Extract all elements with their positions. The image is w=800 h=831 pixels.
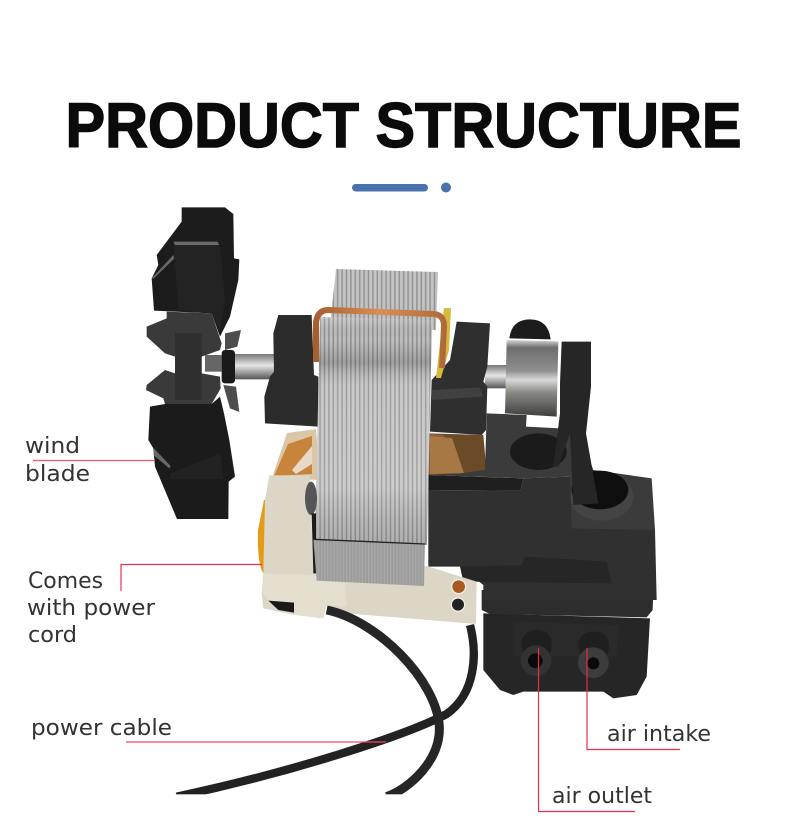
nozzle: air intake bbox=[578, 632, 609, 678]
pivot hole bbox=[510, 433, 567, 470]
tape-wrapped coil bbox=[258, 429, 464, 573]
label: wind blade: blade bbox=[25, 462, 90, 487]
copper shading ring bbox=[316, 310, 444, 368]
title: PRODUCT STRUCTURE bbox=[66, 91, 742, 161]
stator top laminations bbox=[330, 269, 438, 330]
label: comes with power cord: with power bbox=[27, 596, 156, 621]
power cables bbox=[167, 610, 500, 808]
bracket plate bbox=[262, 475, 477, 624]
rear shaft bbox=[485, 365, 508, 388]
nozzle: air outlet bbox=[521, 630, 552, 676]
stator bottom cap bbox=[313, 539, 425, 586]
title accent: bar and dot bbox=[352, 182, 451, 192]
front housing face bbox=[428, 477, 657, 600]
label: air intake: air intake bbox=[607, 722, 711, 747]
metal collar bbox=[505, 340, 558, 417]
rocker arm bbox=[553, 342, 598, 505]
label: wind blade: wind bbox=[25, 434, 80, 459]
product photo: motor illustration bbox=[146, 207, 657, 808]
label: comes with power cord bbox=[27, 564, 262, 648]
yellow insulation tape bbox=[436, 308, 451, 378]
rear winding copper bbox=[428, 433, 462, 474]
label: comes with power cord: cord bbox=[28, 623, 77, 648]
front shaft bbox=[235, 354, 275, 379]
stator laminated band bbox=[315, 317, 432, 545]
label: air outlet: air outlet bbox=[552, 784, 652, 809]
front bearing bracket bbox=[264, 315, 318, 427]
upper housing and rear bracket bbox=[428, 319, 657, 600]
label: air outlet bbox=[538, 648, 652, 812]
label: power cable: power cable bbox=[31, 716, 172, 741]
screw bbox=[305, 482, 317, 515]
label: comes with power cord: Comes bbox=[28, 569, 103, 594]
round socket bbox=[570, 471, 633, 521]
rear bearing bracket bbox=[430, 322, 490, 435]
knob bbox=[509, 319, 551, 339]
label: wind blade bbox=[25, 434, 155, 487]
plate terminal holes bbox=[451, 579, 466, 612]
pump base lower housing bbox=[482, 590, 653, 698]
label: air intake bbox=[587, 648, 711, 750]
wind blade fan bbox=[146, 207, 241, 519]
